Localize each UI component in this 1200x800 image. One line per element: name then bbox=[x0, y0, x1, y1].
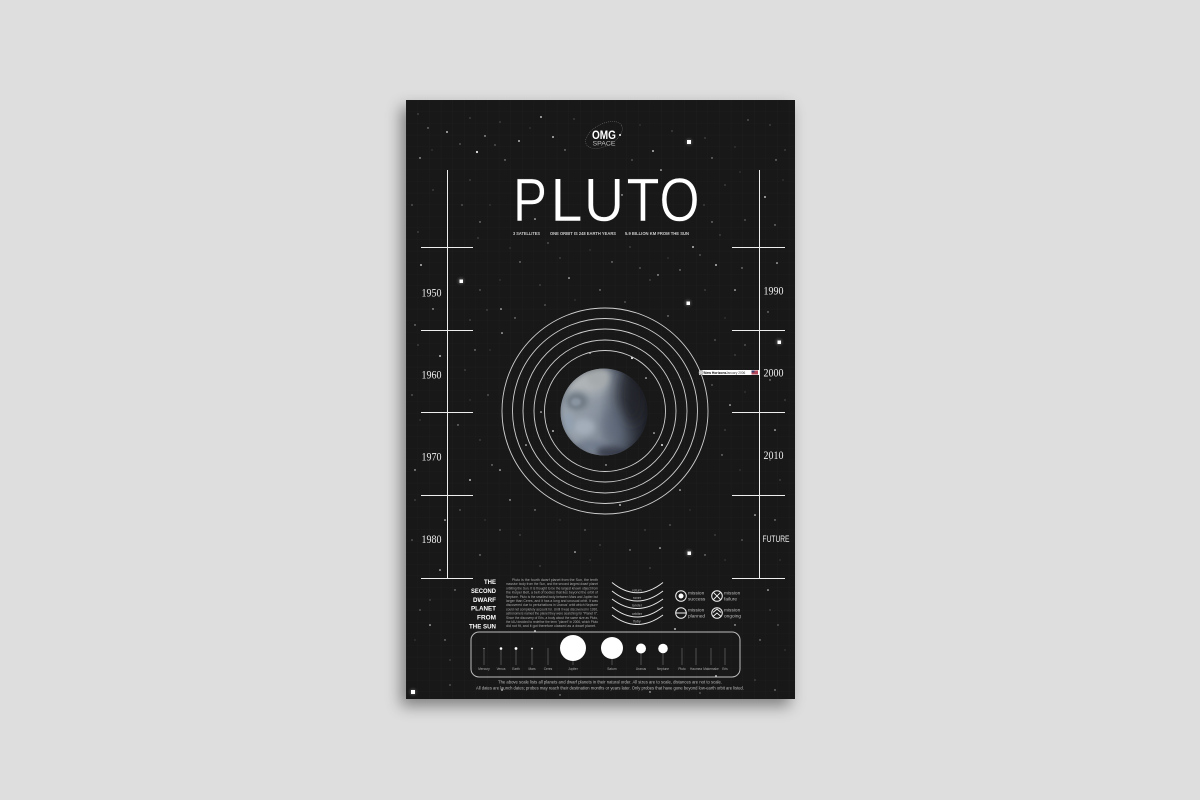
legend: mission types bbox=[612, 582, 663, 624]
poster background bbox=[406, 100, 795, 699]
legend: mission status: failure bbox=[724, 596, 737, 602]
title: U bbox=[584, 166, 624, 235]
body text: the Kuiper Belt, a belt of bodies that lies beyond the orbit of bbox=[506, 591, 599, 595]
planet size scale: Pluto bbox=[678, 667, 686, 671]
mission marker: New Horizons: New Horizons bbox=[704, 371, 727, 375]
timeline: right: 2010 bbox=[764, 448, 784, 462]
legend: mission status: mission bbox=[688, 590, 705, 596]
mission rings bbox=[502, 308, 708, 514]
title: P bbox=[513, 166, 547, 235]
side heading: PLANET bbox=[471, 606, 496, 612]
planet size scale: Earth bbox=[512, 667, 520, 671]
footnote: The above scale lists all planets and dwarf planets in their natural order. All sizes are to scale, distances are not to scale. bbox=[498, 680, 722, 684]
timeline: right: FUTURE bbox=[762, 534, 790, 545]
logo: OMG Space: SPACE bbox=[592, 142, 616, 148]
title: T bbox=[626, 166, 660, 235]
body text bbox=[506, 578, 599, 628]
planet size scale: Neptune bbox=[657, 667, 669, 671]
legend: mission status bbox=[676, 590, 741, 620]
subtitle facts: ONE ORBIT IS 248 EARTH YEARS bbox=[550, 231, 616, 236]
legend: mission types: lander bbox=[632, 604, 643, 608]
mission marker: New Horizons: January 2006 bbox=[726, 371, 746, 375]
side heading bbox=[469, 579, 497, 630]
planet size scale: Saturn bbox=[607, 667, 617, 671]
body text: could not completely account for. Until it was discovered in 1930, bbox=[506, 607, 598, 611]
legend: mission status: planned bbox=[688, 614, 705, 620]
body text: Pluto is the fourth dwarf planet from the Sun, the tenth bbox=[512, 578, 598, 582]
legend: mission status: mission bbox=[688, 608, 705, 614]
timeline: left: 1980 bbox=[422, 532, 442, 546]
legend: mission status: success bbox=[688, 598, 706, 602]
logo: OMG Space bbox=[581, 116, 627, 154]
logo: OMG Space: OMG bbox=[592, 130, 616, 142]
body text: larger than Ceres, and it has a long and unusual orbit. It was bbox=[506, 599, 598, 603]
timeline: right bbox=[732, 170, 790, 578]
body text: Since the discovery of Eris, a body about the same size as Pluto, bbox=[506, 616, 598, 620]
body text: the IAU decided to redefine the term "planet" in 2006, which Pluto bbox=[506, 620, 598, 624]
title: O bbox=[660, 166, 700, 235]
legend: mission types: orbiter bbox=[632, 612, 643, 616]
legend: mission status: ongoing bbox=[724, 614, 741, 620]
side heading: THE bbox=[484, 579, 497, 586]
subtitle facts: 5.9 BILLION KM FROM THE SUN bbox=[625, 231, 689, 236]
planet size scale bbox=[471, 632, 740, 677]
planet size scale: Venus bbox=[497, 667, 506, 671]
background grid bbox=[406, 100, 795, 699]
timeline: left: 1970 bbox=[422, 450, 442, 464]
body text: discovered due to perturbations in Uranus' orbit which Neptune bbox=[506, 603, 598, 607]
side heading: DWARF bbox=[473, 597, 496, 604]
timeline: right: 2000 bbox=[764, 366, 784, 380]
planet size scale: Eris bbox=[722, 667, 728, 671]
legend: mission status: mission bbox=[724, 608, 741, 614]
planet size scale: Ceres bbox=[544, 667, 553, 671]
subtitle facts bbox=[513, 231, 689, 236]
body text: Neptune. Pluto is the smallest body between Mars and Jupiter but bbox=[506, 595, 598, 599]
subtitle facts: 3 SATELLITES bbox=[513, 231, 540, 236]
planet size scale: Uranus bbox=[636, 667, 647, 671]
star field bbox=[410, 113, 786, 696]
title: L bbox=[550, 166, 582, 235]
side heading: SECOND bbox=[471, 588, 496, 595]
footnote bbox=[476, 680, 744, 690]
planet: Pluto bbox=[560, 368, 648, 456]
timeline: right: 1990 bbox=[764, 284, 784, 298]
side heading: THE SUN bbox=[469, 624, 496, 630]
legend: mission types: return bbox=[632, 588, 642, 592]
body text: astronomers named the planet they were searching for "Planet X". bbox=[506, 612, 598, 616]
title bbox=[513, 166, 700, 235]
planet size scale: Mars bbox=[528, 667, 536, 671]
timeline: left: 1960 bbox=[422, 368, 442, 382]
side heading: FROM bbox=[477, 614, 496, 622]
planet size scale: Jupiter bbox=[568, 667, 579, 671]
planet size scale: Haumea bbox=[690, 667, 702, 671]
planet size scale: Makemake bbox=[703, 667, 719, 671]
legend: mission types: flyby bbox=[633, 620, 641, 624]
planet size scale: Mercury bbox=[478, 667, 490, 671]
legend: mission types: rover bbox=[633, 596, 642, 600]
body text: did not fit, and it got therefore classed as a dwarf planet. bbox=[506, 624, 596, 628]
body text: orbiting the Sun. It is thought to be the largest known object from bbox=[506, 586, 598, 590]
footnote: All dates are launch dates; probes may reach their destination months or years later. Only probes that have gone beyond low-earth orbit are listed. bbox=[476, 686, 744, 690]
timeline: left: 1950 bbox=[422, 286, 442, 300]
legend: mission status: mission bbox=[724, 590, 741, 596]
body text: massive body from the Sun, and the second largest dwarf planet bbox=[506, 582, 598, 586]
timeline: left bbox=[421, 170, 473, 578]
mission marker: New Horizons bbox=[699, 370, 759, 375]
